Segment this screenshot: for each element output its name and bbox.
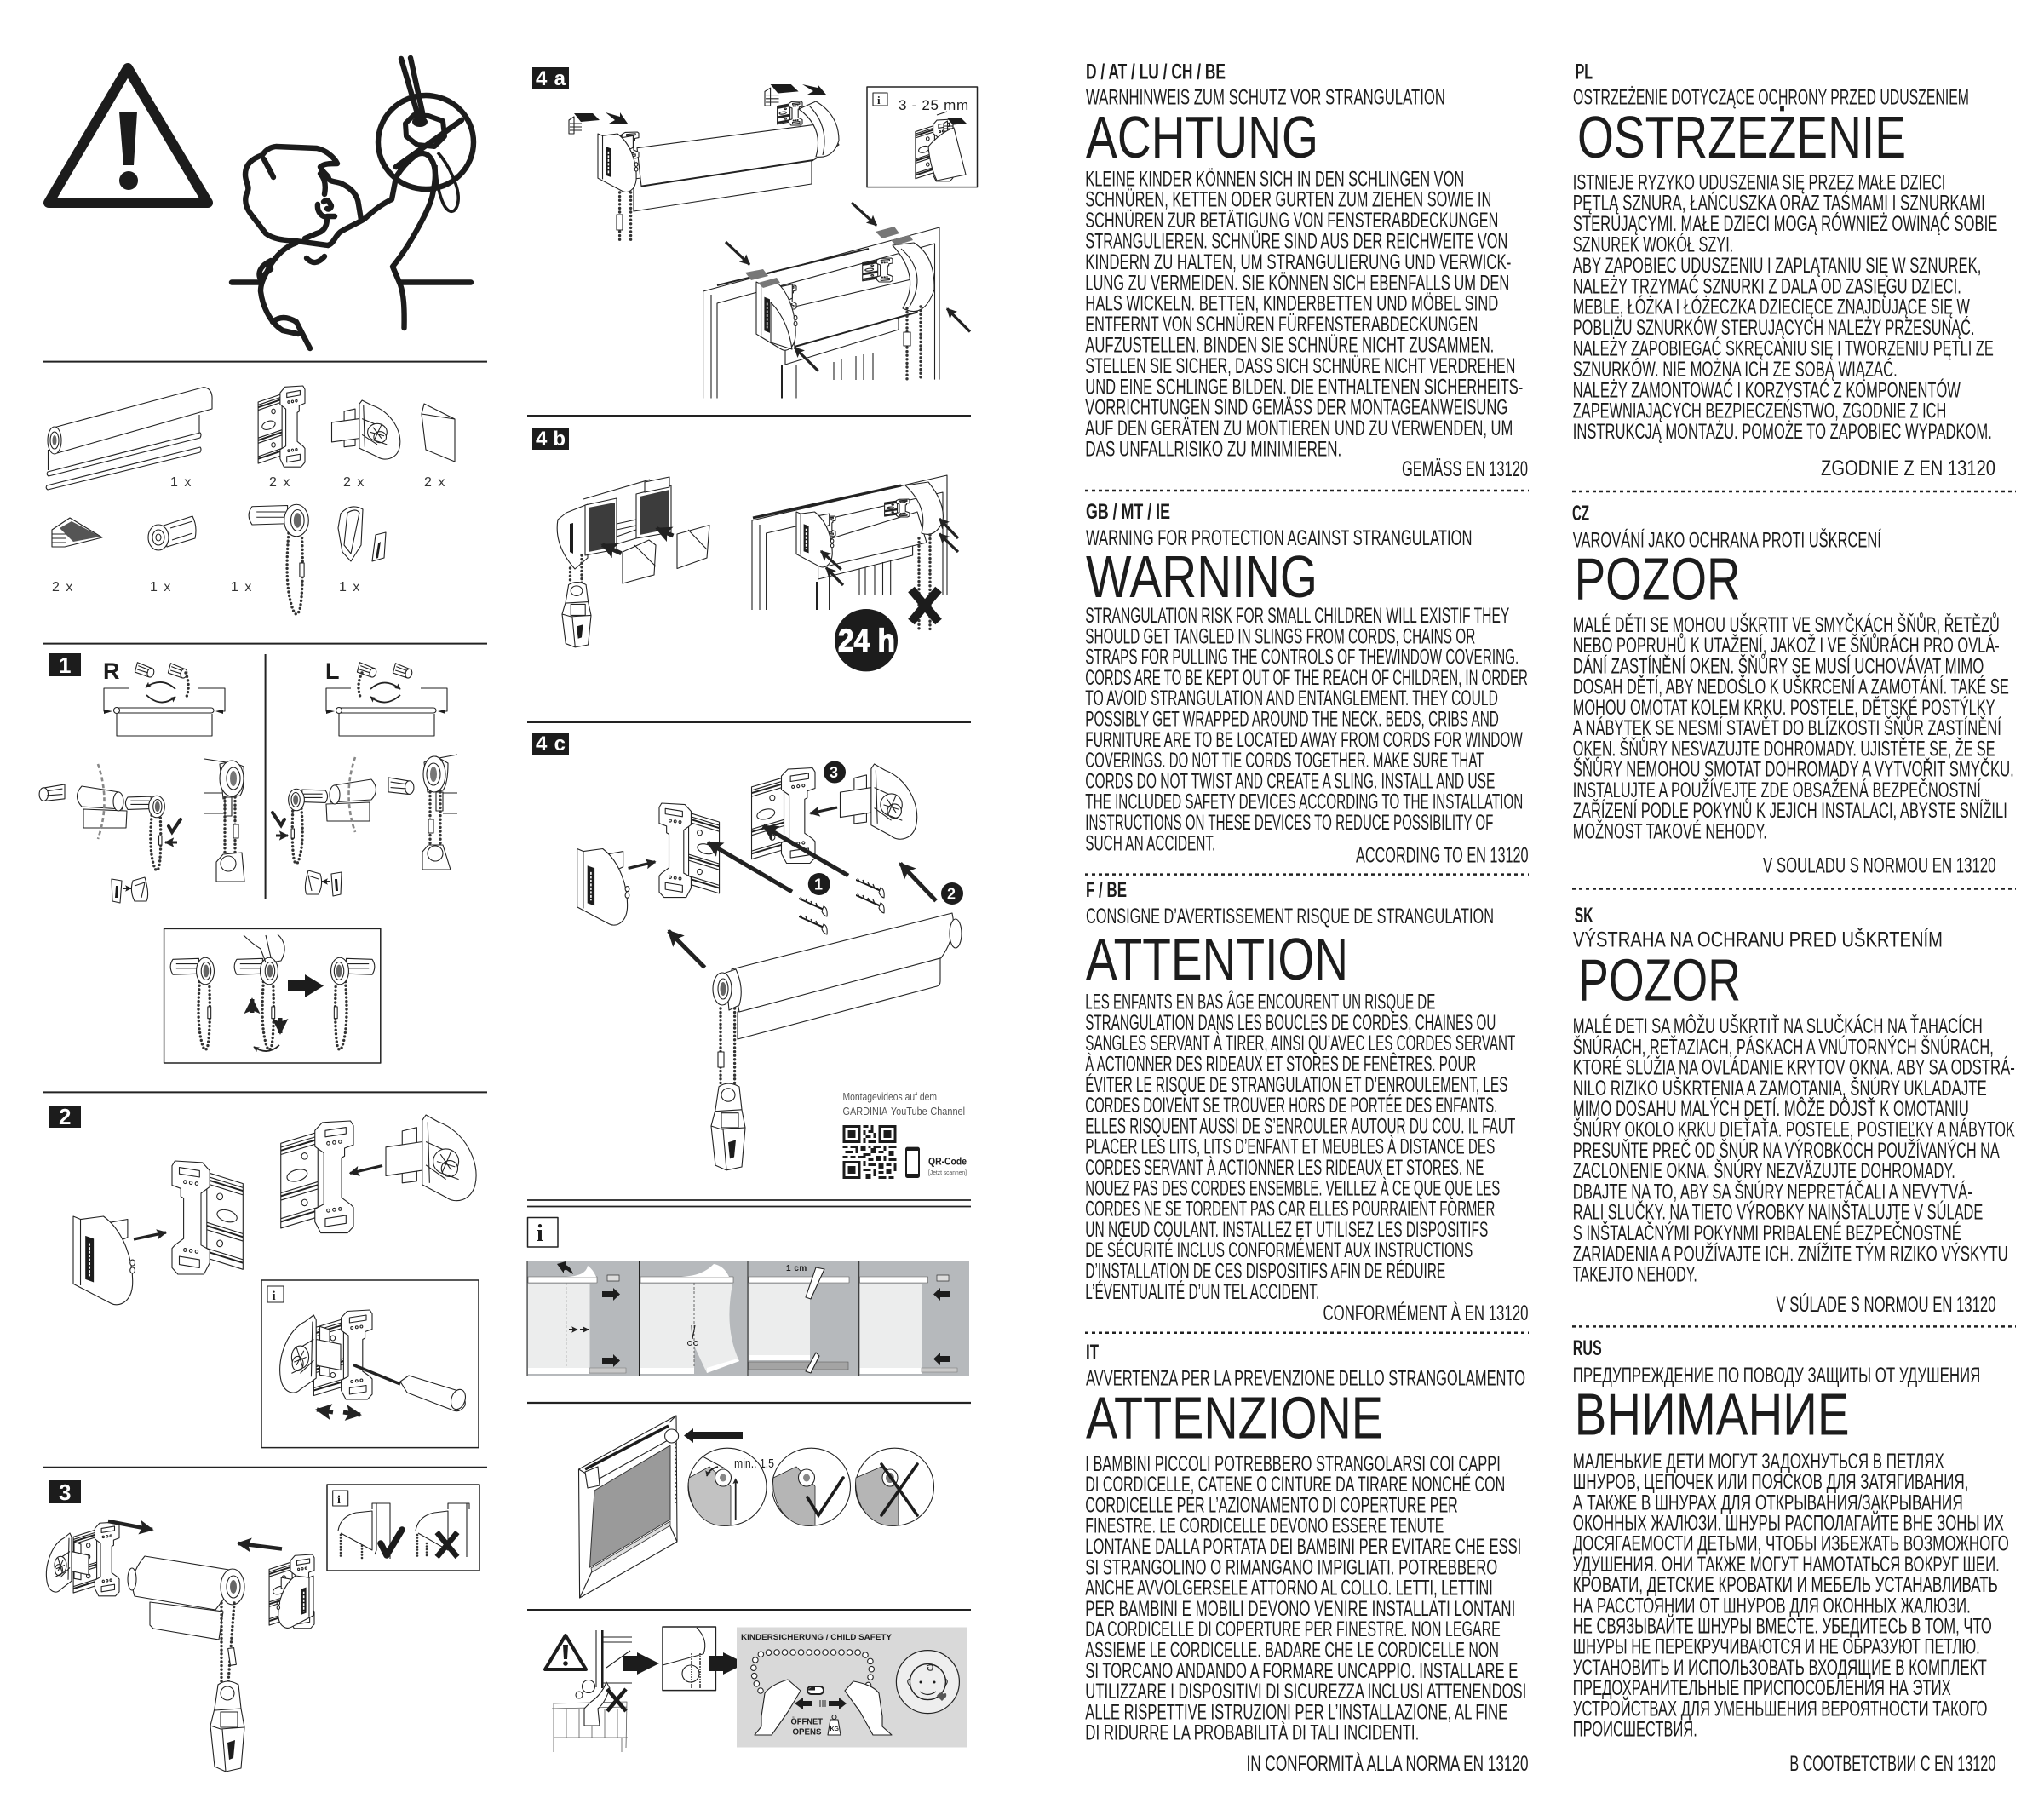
bead chain loop	[754, 1652, 871, 1691]
arrows to roller	[669, 864, 936, 968]
diagram: left side assembly	[273, 757, 414, 896]
body text: L’ÉVENTUALITÉ D’UN TEL ACCIDENT.	[1085, 1279, 1319, 1304]
part: adhesive pad	[422, 404, 455, 462]
chain and weight	[711, 1008, 745, 1170]
body text: SANGLES SERVANT À TIRER, AINSI QU’AVEC LES CORDES SERVANT	[1085, 1031, 1515, 1055]
body text: AUFZUSTELLEN. BINDEN SIE SCHNÜRE NICHT ZUSAMMEN.	[1085, 334, 1494, 358]
body text: TAKEJTO NEHODY.	[1573, 1263, 1697, 1287]
window with blind	[579, 1416, 679, 1598]
callout: correct and incorrect hang	[327, 1485, 479, 1571]
panel: window mounting	[579, 1416, 933, 1598]
quantity labels: 1 x	[339, 580, 361, 595]
divider	[527, 1200, 971, 1206]
divider	[527, 1402, 971, 1404]
body text: CORDS DO NOT TWIST AND CREATE A SLING. INSTALL AND USE	[1085, 769, 1495, 793]
quantity labels: 1 x	[150, 580, 172, 595]
heading: R: R	[103, 658, 119, 684]
body text: NOUEZ PAS DES CORDES ENSEMBLE. VEILLEZ À CE QUE QUE LES	[1085, 1175, 1500, 1200]
icon: weight: KG	[830, 1726, 840, 1732]
callout: 3-25 mm	[867, 87, 978, 187]
body text: STELLEN SIE SICHER, DASS SICH SCHNÜRE NICHT VERDREHEN	[1085, 354, 1515, 378]
body text	[1085, 167, 1523, 462]
body text: SI TORCANO ANDANDO A FORMARE UNCAPPIO. INSTALLARE E	[1085, 1659, 1518, 1683]
text panel: Italian	[1085, 1341, 1528, 1776]
divider	[527, 415, 971, 417]
quantity labels: 2 x	[269, 475, 291, 490]
text panel: French	[1085, 878, 1528, 1325]
body text: SCHNÜREN, KETTEN ODER GURTEN ZUM ZIEHEN SOWIE IN	[1085, 188, 1491, 212]
badge: 3	[49, 1479, 81, 1505]
text: QR label: QR-Code	[928, 1156, 967, 1168]
body text: STRANGULATION DANS LES BOUCLES DE CORDES, CHAINES OU	[1085, 1011, 1496, 1035]
country code: CZ	[1572, 502, 1589, 526]
text panel: German	[1085, 60, 1528, 481]
body text: UTILIZZARE I DISPOSITIVI DI SICUREZZA INCLUSI ATTENENDOSI	[1085, 1680, 1526, 1703]
standard note: IN CONFORMITÀ ALLA NORMA EN 13120	[1247, 1751, 1528, 1776]
body text: ПРОИСШЕСТВИЯ.	[1573, 1717, 1697, 1741]
panel 3: 1 cm	[786, 1264, 807, 1273]
country codes: F / BE	[1086, 878, 1127, 902]
body text: POSSIBLY GET WRAPPED AROUND THE NECK. BEDS, CRIBS AND	[1085, 707, 1499, 731]
QR code	[843, 1125, 896, 1179]
body text: VORRICHTUNGEN SIND GEMÄSS DER MONTAGEANWEISUNG	[1085, 396, 1507, 420]
body text: CORDES SERVANT À ACTIONNER LES RIDEAUX ET STORES. NE	[1085, 1155, 1484, 1180]
chain and weight	[210, 1603, 244, 1772]
number 1	[808, 873, 830, 895]
arrow	[134, 1232, 166, 1239]
body text: SZNUREK WOKÓŁ SZYI.	[1573, 232, 1733, 257]
blind with adhesive tape	[557, 477, 709, 647]
panel: step 4b	[532, 428, 958, 671]
part: bracket	[258, 386, 305, 467]
closed end cap	[73, 1216, 135, 1305]
heading: L: L	[325, 658, 339, 684]
badge: 24 h	[835, 609, 898, 671]
country codes: D / AT / LU / CH / BE	[1086, 60, 1226, 83]
country code: RUS	[1573, 1336, 1602, 1360]
arrow	[350, 1165, 382, 1174]
number 3	[824, 761, 846, 784]
callout: 3-25 mm: i	[877, 94, 881, 106]
body text: STRANGULIEREN. SCHNÜRE SIND AUS DER REICHWEITE VON	[1085, 230, 1507, 254]
closed end cap	[577, 848, 629, 925]
body text: ANCHE AVVOLGERSELE ATTORNO AL COLLO. LETTI, LETTINI	[1085, 1577, 1493, 1600]
heading: ATTENTION	[1086, 926, 1348, 992]
body text	[1085, 1452, 1526, 1745]
body text	[1573, 170, 1997, 444]
body text: STRAPS FOR PULLING THE CONTROLS OF THEWINDOW COVERING.	[1085, 646, 1519, 669]
divider	[527, 1609, 971, 1611]
arrow	[684, 1428, 743, 1443]
bracket 2	[752, 768, 815, 864]
body text: D’INSTALLATION DE CES DISPOSITIFS AFIN DE RÉDUIRE	[1085, 1259, 1445, 1283]
part: clip	[52, 518, 102, 547]
text: opens	[790, 1715, 823, 1738]
callout: correct and incorrect hang: i	[337, 1494, 341, 1507]
panel: step 4c	[532, 733, 967, 1179]
part: chain weight	[338, 507, 386, 561]
body text	[1573, 1450, 2009, 1741]
panel: step 3	[46, 1479, 479, 1772]
body text: ASSIEME LE CORDICELLE. BADARE CHE LE CORDICELLE NON	[1085, 1639, 1499, 1663]
panel: step 1	[39, 652, 457, 1063]
panel: info, cutting the fabric	[527, 1218, 969, 1376]
body text: SI STRANGOLINO O RIMANGANO IMPIGLIATI. POTREBBERO	[1085, 1555, 1497, 1579]
body text: ALLE RISPETTIVE ISTRUZIONI PER L’INSTALLAZIONE, AL FINE	[1085, 1700, 1507, 1724]
number 2: 2	[947, 886, 956, 903]
body text: DE SÉCURITÉ INCLUS CONFORMÉMENT AUX INSTRUCTIONS	[1085, 1238, 1473, 1262]
badge: 2: 2	[59, 1104, 71, 1129]
country codes: GB / MT / IE	[1086, 500, 1170, 524]
heading: ВНИМАНИЕ	[1575, 1382, 1850, 1448]
subheading: VAROVÁNÍ JAKO OCHRANA PROTI UŠKRCENÍ	[1573, 528, 1881, 553]
standard note: ACCORDING TO EN 13120	[1356, 843, 1529, 867]
text: video note: Montagevideos auf dem	[843, 1090, 937, 1103]
body text	[1573, 1014, 2015, 1287]
warning triangle	[49, 68, 208, 203]
body text	[1573, 611, 2014, 843]
heading: KINDERSICHERUNG / CHILD SAFETY	[741, 1633, 893, 1642]
arrow	[709, 1652, 746, 1675]
fabric strip panels	[527, 1261, 969, 1376]
quantity labels: 2 x	[343, 475, 365, 490]
panel 4	[860, 1275, 957, 1374]
detail: minimum turns	[688, 1448, 774, 1526]
body text: THE INCLUDED SAFETY DEVICES ACCORDING TO THE INSTALLATION	[1085, 790, 1523, 814]
diagram: right side assembly	[39, 764, 181, 903]
text panel: Russian	[1573, 1336, 2009, 1776]
parts list	[46, 386, 455, 614]
text panel: Czech	[1572, 502, 2014, 878]
number 1: 1	[814, 876, 823, 893]
heading: POZOR	[1578, 946, 1741, 1013]
diagram: right side blind	[104, 663, 225, 736]
divider	[43, 1091, 487, 1093]
icon: baby reaching for cord with prohibition sign	[232, 58, 474, 348]
body text: HALS WICKELN. BETTEN, KINDERBETTEN UND MÖBEL SIND	[1085, 292, 1498, 316]
divider: right and left	[265, 654, 267, 899]
heading: POZOR	[1575, 545, 1741, 612]
end cap with gears	[386, 1115, 476, 1201]
body text: KINDERN ZU HALTEN, UM STRANGULIERUNG UND VERWICK-	[1085, 250, 1511, 274]
arrow	[629, 862, 655, 868]
roller with clips	[569, 84, 839, 243]
callout: screwdriver adjustment: i	[273, 1290, 276, 1303]
detail: correct	[772, 1448, 850, 1526]
dotted separators	[1085, 491, 2016, 1333]
arrows to screw holes	[708, 826, 848, 892]
body text: KLEINE KINDER KÖNNEN SICH IN DEN SCHLINGEN VON	[1085, 167, 1464, 191]
badge: 4 a: 4 a	[536, 67, 566, 90]
subheading: WARNING FOR PROTECTION AGAINST STRANGULATION	[1086, 526, 1472, 550]
body text: COVERINGS. DO NOT TIE CORDS TOGETHER. MAKE SURE THAT	[1085, 749, 1484, 773]
body text: SHOULD GET TANGLED IN SLINGS FROM CORDS, CHAINS OR	[1085, 624, 1475, 648]
badge: 2	[49, 1104, 81, 1129]
divider	[43, 361, 487, 363]
bead chain highlights	[754, 1652, 871, 1691]
panel 2	[640, 1264, 739, 1374]
body text: SUCH AN ACCIDENT.	[1085, 831, 1215, 855]
diagram: left side close-up	[422, 755, 457, 870]
text panel: Slovak	[1573, 904, 2015, 1317]
window view	[752, 475, 958, 632]
right bracket with cap	[269, 1554, 314, 1629]
body text: DI CORDICELLE, CATENE O CINTURE DA TIRARE NONCHÉ CON	[1085, 1472, 1505, 1497]
heading: WARNING	[1086, 543, 1318, 610]
standard note: GEMÄSS EN 13120	[1402, 457, 1528, 481]
body text: UN NŒUD COULANT. INSTALLEZ ET UTILISEZ LES DISPOSITIFS	[1085, 1218, 1488, 1242]
quantity labels: 1 x	[231, 580, 253, 595]
subheading: VÝSTRAHA NA OCHRANU PRED UŠKRTENÍM	[1573, 927, 1943, 951]
body text: ELLES RISQUENT AUSSI DE S’ENROULER AUTOUR DU COU. IL FAUT	[1085, 1114, 1515, 1138]
panel 1	[528, 1261, 626, 1374]
body text: CORDES NE SE TORDENT PAS CAR ELLES POURRAIENT FORMER	[1085, 1198, 1495, 1221]
standard note: ZGODNIE Z EN 13120	[1821, 457, 1995, 480]
panel: child safety	[545, 1627, 967, 1752]
cross	[911, 589, 939, 622]
panel: step 2	[49, 1104, 479, 1448]
country code: PL	[1576, 60, 1593, 83]
text: opens: ÖFFNET	[790, 1715, 823, 1727]
roller	[713, 913, 962, 1039]
arrow	[623, 1652, 659, 1675]
screws	[799, 878, 884, 934]
subheading: CONSIGNE D’AVERTISSEMENT RISQUE DE STRANGULATION	[1086, 905, 1494, 928]
panel: step 4a	[532, 67, 978, 399]
detail box	[663, 1627, 715, 1691]
body text: DI RIDURRE LA PROBABILITÀ DI TALI INCIDENTI.	[1085, 1721, 1419, 1745]
heading: OSTRZEŻENIE	[1577, 104, 1906, 170]
part: plug	[148, 516, 196, 550]
text: video note	[843, 1090, 965, 1117]
icon: info	[528, 1218, 558, 1247]
subheading: AVVERTENZA PER LA PREVENZIONE DELLO STRANGOLAMENTO	[1086, 1367, 1525, 1391]
part: roller blind	[46, 388, 212, 490]
quantity labels: 1 x	[170, 475, 192, 490]
badge: 1	[49, 652, 81, 678]
text: QR label	[928, 1156, 967, 1176]
left bracket with cap	[46, 1522, 119, 1596]
body text: ENTFERNT VON SCHNÜREN FÜRFENSTERABDECKUNGEN	[1085, 313, 1478, 336]
body text: PER BAMBINI E MOBILI DEVONO VENIRE INSTALLATI LONTANI	[1085, 1597, 1515, 1621]
body text: CORDES DOIVENT SE TROUVER HORS DE PORTÉE DES ENFANTS.	[1085, 1093, 1497, 1117]
text panel: English	[1085, 500, 1529, 867]
body text: FURNITURE ARE TO BE LOCATED AWAY FROM CORDS FOR WINDOW	[1085, 728, 1523, 752]
body text: CORDICELLE PER L’AZIONAMENTO DI COPERTURE PER	[1085, 1493, 1458, 1517]
country code: IT	[1086, 1341, 1099, 1364]
callout: chain orientation	[164, 928, 381, 1063]
number 2	[941, 882, 963, 905]
bracket 1	[659, 803, 720, 898]
body text	[1085, 604, 1528, 855]
callout: 3-25 mm: 3 - 25 mm	[899, 97, 969, 113]
panel 3	[749, 1264, 849, 1373]
badge: 3: 3	[59, 1479, 71, 1505]
quantity labels: 2 x	[52, 580, 74, 595]
quantity labels	[52, 475, 446, 595]
warning triangle small	[545, 1635, 586, 1669]
badge: 24 h: 24 h	[838, 623, 895, 658]
body text: LES ENFANTS EN BAS ÂGE ENCOURENT UN RISQUE DE	[1085, 990, 1435, 1014]
callout: screwdriver adjustment	[261, 1280, 479, 1448]
text panel: Polish	[1573, 60, 1997, 480]
detail: minimum turns: min.: 1,5	[734, 1456, 774, 1471]
body text: PLACER LES LITS, LITS D’ENFANT ET MEUBLES À DISTANCE DES	[1085, 1135, 1495, 1159]
badge: 1: 1	[59, 652, 71, 678]
body text: DAS UNFALLRISIKO ZU MINIMIEREN.	[1085, 438, 1341, 462]
quantity labels: 2 x	[424, 475, 446, 490]
body text: UND EINE SCHLINGE BILDEN. DIE ENTHALTENEN SICHERHEITS-	[1085, 375, 1523, 399]
text: opens: OPENS	[792, 1728, 822, 1738]
divider	[43, 1467, 487, 1468]
number 3: 3	[830, 764, 838, 781]
body text: DA CORDICELLE DI COPERTURE PER FINESTRE. NON LEGARE	[1085, 1617, 1501, 1641]
icon: info: i	[537, 1221, 543, 1247]
divider	[527, 721, 971, 723]
bracket left	[172, 1161, 243, 1274]
heading: ATTENZIONE	[1086, 1385, 1383, 1451]
child safety panel	[737, 1627, 967, 1748]
divider	[43, 643, 487, 645]
body text: MOŽNOST TAKOVÉ NEHODY.	[1573, 819, 1767, 843]
icon: weight	[828, 1715, 841, 1735]
part: chain control	[249, 504, 308, 614]
diagram: left side blind	[326, 663, 447, 736]
body text: STRANGULATION RISK FOR SMALL CHILDREN WILL EXISTIF THEY	[1085, 604, 1509, 628]
diagram: right side close-up	[204, 759, 244, 882]
body text: ÉVITER LE RISQUE DE STRANGULATION ET D’ENROULEMENT, LES	[1085, 1072, 1507, 1097]
body text: LUNG ZU VERMEIDEN. SIE KÖNNEN SICH EBENFALLS UM DEN	[1085, 271, 1509, 295]
body text: À ACTIONNER DES RIDEAUX ET STORES DE FENÊTRES. POUR	[1085, 1051, 1476, 1077]
open end cap	[840, 764, 917, 839]
body text	[1085, 990, 1515, 1304]
standard note: CONFORMÉMENT À EN 13120	[1323, 1301, 1528, 1325]
badge: 4 c: 4 c	[536, 733, 566, 755]
roller	[128, 1556, 244, 1640]
window installation	[703, 203, 970, 399]
child in crib by window	[552, 1630, 632, 1752]
subheading: WARNHINWEIS ZUM SCHUTZ VOR STRANGULATION	[1086, 86, 1445, 110]
baby face icon	[896, 1651, 959, 1714]
country code: SK	[1575, 904, 1593, 928]
body text: I BAMBINI PICCOLI POTREBBERO STRANGOLARSI COI CAPPI	[1085, 1452, 1501, 1476]
text: video note: GARDINIA-YouTube-Channel	[843, 1105, 965, 1117]
arrow	[810, 807, 837, 813]
bracket right	[281, 1121, 353, 1233]
part: end cap	[332, 400, 400, 459]
detail: incorrect	[855, 1448, 933, 1526]
badge: 4 b: 4 b	[536, 428, 566, 451]
phone icon	[905, 1147, 920, 1178]
body text: SCHNÜREN ZUR BETÄTIGUNG VON FENSTERABDECKUNGEN	[1085, 209, 1498, 233]
body text: CORDS ARE TO BE KEPT OUT OF THE REACH OF CHILDREN, IN ORDER	[1085, 666, 1528, 690]
arrow	[238, 1543, 282, 1548]
body text: TO AVOID STRANGULATION AND ENTANGLEMENT. THEY COULD	[1085, 687, 1498, 710]
QR block	[843, 1090, 967, 1179]
body text: LONTANE DALLA PORTATA DEI BAMBINI PER EVITARE CHE ESSI	[1085, 1535, 1521, 1559]
heading: ACHTUNG	[1086, 104, 1318, 170]
arrows	[795, 1698, 847, 1709]
hands	[755, 1680, 892, 1735]
body text: INSTRUCTIONS ON THESE DEVICES TO REDUCE POSSIBILITY OF	[1085, 811, 1493, 835]
body text: FINESTRE. LE CORDICELLE DEVONO ESSERE TENUTE	[1085, 1514, 1444, 1538]
text: QR label: [Jetzt scannen]	[928, 1170, 967, 1176]
arrow	[108, 1521, 152, 1530]
body text: AUF DEN GERÄTEN ZU MONTIEREN UND ZU VERWENDEN, UM	[1085, 417, 1513, 440]
